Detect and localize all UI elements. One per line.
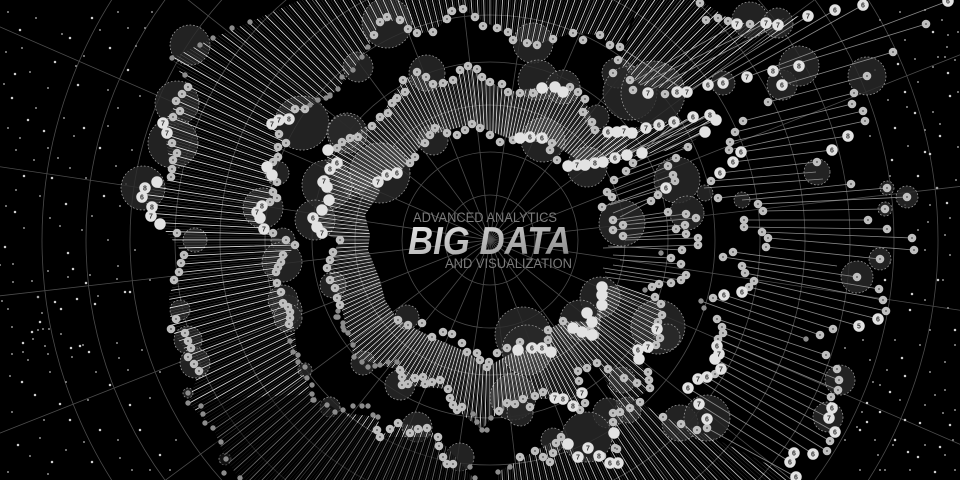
title: big data: BIG DATA — [408, 220, 571, 263]
node digits: 77868777887778667766 — [140, 116, 399, 237]
radial spoke bands — [190, 0, 790, 480]
data nodes, medium — [171, 3, 926, 464]
explicit data lines, right fan — [602, 1, 948, 477]
data nodes, small — [172, 22, 806, 478]
node digits: 67676766666676768788778766 — [530, 326, 837, 480]
node digits: 667866776668777766687 — [528, 0, 950, 169]
node digits: 76678866666866665677 — [646, 63, 880, 373]
subtitle: and visualization: AND VISUALIZATION — [445, 256, 572, 271]
subtitle: advanced analytics: ADVANCED ANALYTICS — [413, 210, 557, 225]
